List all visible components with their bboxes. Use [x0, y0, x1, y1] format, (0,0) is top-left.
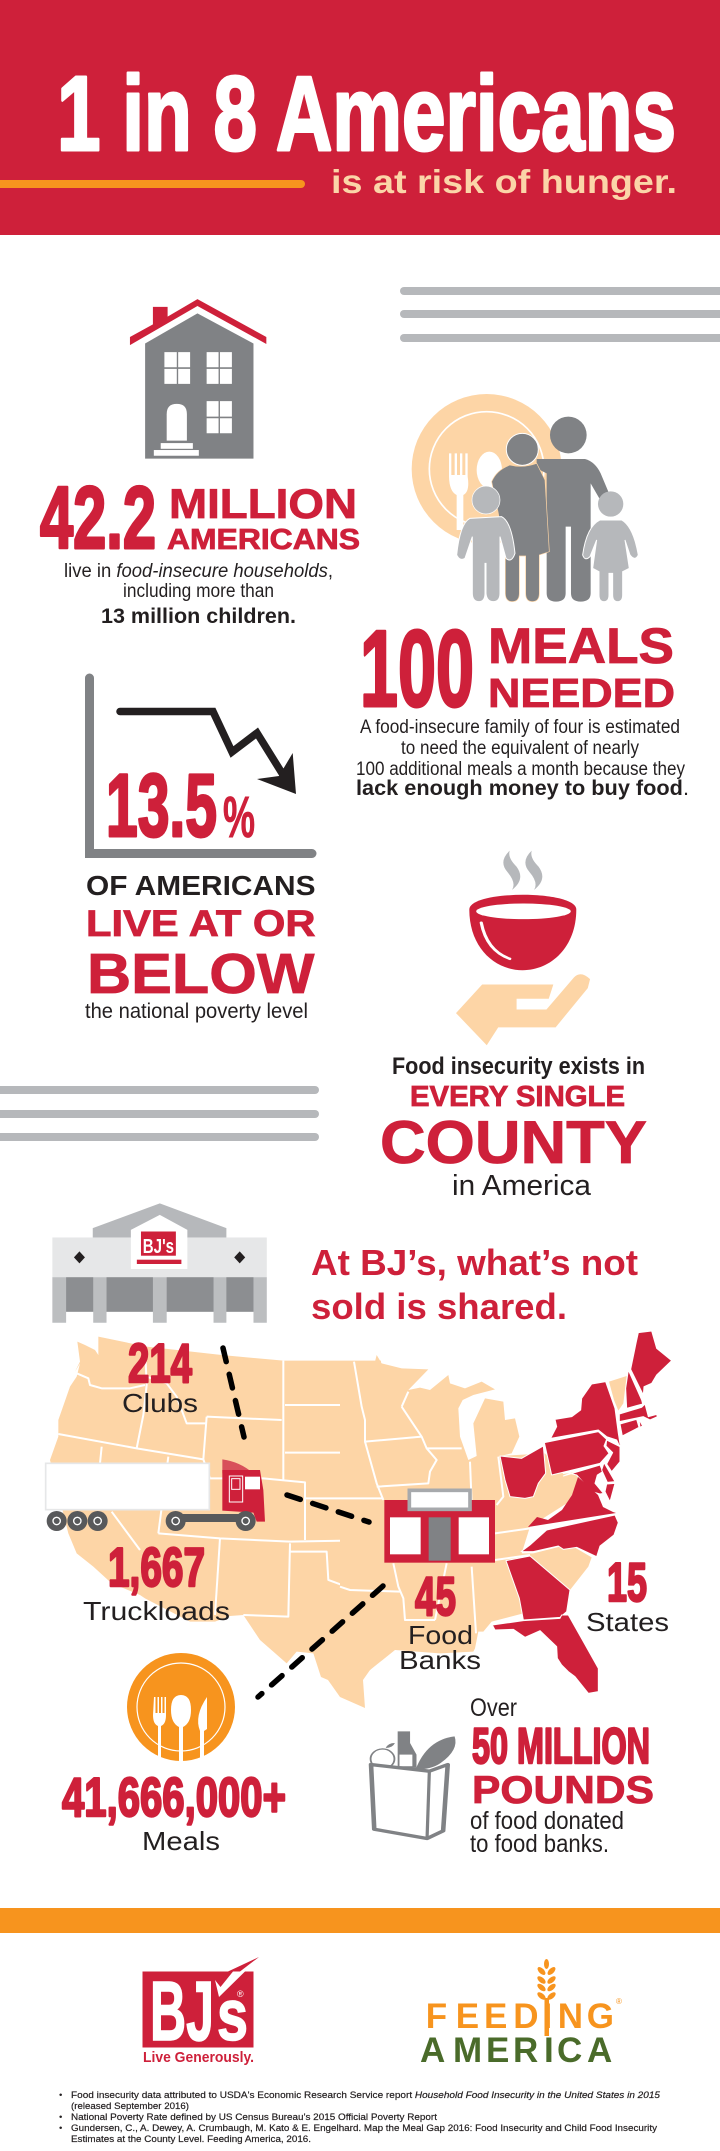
logo: BJ's Live Generously: Live Generously.: [143, 2049, 254, 2066]
logo: BJ's Live Generously: BJ: [150, 1964, 214, 2058]
state: Delaware: [602, 1463, 615, 1482]
panel: 100 meals needed: MEALS: [488, 618, 674, 674]
panel: 42.2 million Americans: 13 million children.: [101, 605, 296, 628]
map: United States: [50, 1331, 672, 1708]
panel: header banner: [0, 0, 720, 235]
icon: house: [130, 299, 266, 459]
footnotes: Estimates at the County Level. Feeding America, 2016.: [71, 2134, 311, 2145]
stat: 1,667 truckloads: 1,667: [108, 1536, 205, 1598]
map: central and southeastern states: [340, 1355, 592, 1687]
decorative lines top right: [400, 287, 720, 342]
state: New York: [551, 1382, 637, 1446]
footnotes: Gundersen, C., A. Dewey, A. Crumbaugh, M. Kato & E. Engelhard. Map the Meal Gap 2016: Food Insecurity and Child Food Insecurity: [71, 2123, 657, 2134]
logo: Feeding America: FEEDING: [426, 1997, 614, 2036]
stat: 41,666,000+ meals: [62, 1766, 286, 1856]
panel: 100 meals needed: to need the equivalent of nearly: [401, 738, 639, 759]
panel: 13.5 percent of Americans: %: [223, 785, 255, 850]
footnotes: Food insecurity data attributed to USDA's Economic Research Service report Household Food Insecurity in the United States in 2015: [71, 2090, 661, 2101]
subtitle: is at risk of hunger.: [331, 163, 677, 200]
panel: every single county: COUNTY: [380, 1109, 647, 1176]
stat: 214 clubs: [122, 1332, 198, 1418]
stat: 214 clubs: 214: [128, 1332, 192, 1394]
state: New Hampshire: [626, 1370, 643, 1408]
state: Vermont: [609, 1376, 627, 1411]
footnotes: •: [59, 2090, 62, 2101]
panel: 13.5 percent of Americans: [85, 755, 316, 1023]
panel: every single county: EVERY SINGLE: [410, 1081, 625, 1113]
stat: 50 million pounds: of food donated: [470, 1807, 624, 1835]
orange rule: [0, 180, 305, 188]
panel: every single county: Food insecurity exists in: [392, 1053, 645, 1080]
state: Virginia: [528, 1477, 616, 1527]
icon: family with plate: [412, 394, 638, 602]
panel: 100 meals needed: [356, 608, 689, 800]
logo: BJ's Live Generously: ®: [237, 1989, 244, 1999]
stat: 45 food banks: Banks: [399, 1645, 481, 1675]
footnotes: [59, 2090, 661, 2145]
panel: 100 meals needed: 100 additional meals a month because they: [356, 759, 685, 780]
state: North Carolina: [521, 1515, 618, 1557]
state: Maryland: [563, 1465, 603, 1494]
stat: 214 clubs: Clubs: [122, 1388, 198, 1418]
panel: 42.2 million Americans: 42.2: [40, 468, 156, 567]
stat: 1,667 truckloads: [83, 1536, 230, 1626]
logo: Feeding America: AMERICA: [420, 2031, 612, 2070]
icon: orange plate with cutlery: [127, 1653, 235, 1761]
stat: 1,667 truckloads: Truckloads: [83, 1596, 230, 1626]
state: Maine: [631, 1331, 672, 1395]
panel: 100 meals needed: 100: [360, 608, 474, 730]
state: Connecticut: [620, 1419, 639, 1436]
state: Virginia eastern shore: [605, 1483, 615, 1502]
state: New Jersey: [606, 1440, 620, 1472]
stat: 41,666,000+ meals: Meals: [142, 1826, 220, 1856]
icon: BJ's wholesale club building: [52, 1203, 267, 1323]
icon: grocery bag: [371, 1731, 456, 1839]
orange band: [0, 1908, 720, 1933]
panel: 13.5 percent of Americans: the national poverty level: [85, 1000, 308, 1023]
footnotes: National Poverty Rate defined by US Census Bureau's 2015 Official Poverty Report: [71, 2112, 437, 2123]
dashed route lines: [223, 1348, 383, 1697]
state: Florida: [492, 1615, 598, 1693]
decorative lines left: [0, 1086, 319, 1141]
stat: 15 states: 15: [607, 1551, 647, 1613]
logo: Feeding America: ®: [616, 1997, 622, 2006]
map: southeastern red states: [492, 1515, 618, 1693]
chart: poverty decline axis and arrow: [85, 674, 316, 858]
footnotes: (released September 2016): [71, 2101, 189, 2112]
panel: 100 meals needed: NEEDED: [488, 670, 675, 716]
heading: what's not sold is shared: sold is shared.: [311, 1286, 567, 1327]
stat: 41,666,000+ meals: 41,666,000+: [62, 1766, 286, 1828]
stat: 50 million pounds: Over: [470, 1694, 517, 1722]
stat: 45 food banks: Food: [408, 1620, 473, 1650]
logo: BJ's Live Generously: s: [217, 1976, 248, 2056]
stat: 50 million pounds: [470, 1694, 654, 1858]
panel: 100 meals needed: A food-insecure family of four is estimated: [360, 717, 680, 738]
map: northeastern states: [500, 1331, 672, 1502]
state: Ohio: [500, 1446, 546, 1498]
panel: 42.2 million Americans: [40, 468, 360, 628]
stat: 45 food banks: 45: [415, 1565, 456, 1627]
panel: 42.2 million Americans: AMERICANS: [167, 524, 360, 556]
panel: 13.5 percent of Americans: LIVE AT OR: [86, 903, 316, 944]
panel: every single county: in America: [452, 1170, 592, 1202]
state: Rhode Island: [639, 1419, 643, 1427]
stat: 50 million pounds: to food banks.: [470, 1830, 609, 1858]
icon: food bank store: [384, 1490, 495, 1563]
heading: what's not sold is shared: At BJ’s, what’s not: [311, 1242, 638, 1283]
panel: 13.5 percent of Americans: BELOW: [87, 942, 315, 1006]
panel: 100 meals needed: lack enough money to buy food .: [356, 777, 689, 800]
icon: BJ's wholesale club building: BJ's: [143, 1236, 174, 1258]
heading: what's not sold is shared: [311, 1242, 638, 1327]
map: western states: [50, 1337, 381, 1708]
footnotes: •: [59, 2123, 62, 2134]
panel: 13.5 percent of Americans: OF AMERICANS: [86, 870, 316, 901]
stat: 45 food banks: [399, 1565, 481, 1675]
stat: 15 states: States: [586, 1607, 669, 1637]
state: Pennsylvania: [544, 1432, 609, 1475]
panel: 42.2 million Americans: live in food-insecure households,: [64, 561, 333, 582]
panel: 42.2 million Americans: including more than: [123, 581, 274, 602]
panel: every single county: [380, 1053, 647, 1202]
icon: delivery truck: [46, 1459, 265, 1531]
panel: 42.2 million Americans: MILLION: [169, 480, 357, 527]
panel: 13.5 percent of Americans: 13.5: [106, 755, 217, 855]
footnotes: •: [59, 2112, 62, 2123]
state: Georgia: [506, 1556, 570, 1620]
stat: 50 million pounds: POUNDS: [472, 1769, 654, 1812]
logo: Feeding America: [420, 1959, 622, 2070]
icon: steaming bowl and hand: [456, 851, 590, 1045]
state: Massachusetts: [619, 1404, 657, 1422]
stat: 15 states: [586, 1551, 669, 1637]
